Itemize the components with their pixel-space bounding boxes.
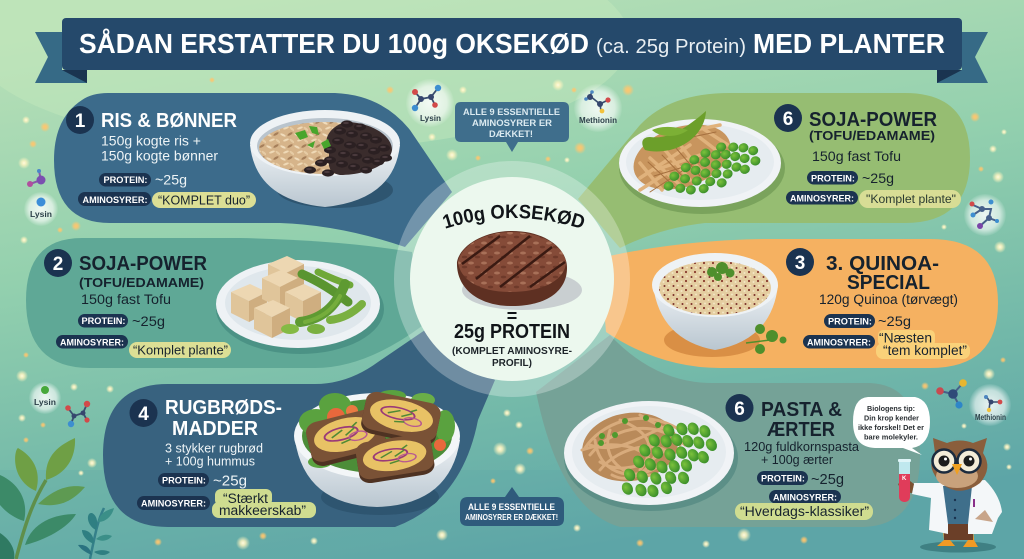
protein row: [757, 471, 844, 488]
aminosyrer row: AMINOSYRER:: [141, 498, 206, 510]
aminosyrer row: [803, 330, 970, 359]
heading: pasta og ærter: [761, 399, 842, 441]
aminosyrer row: AMINOSYRER:: [60, 338, 124, 348]
speech bubble: [853, 397, 930, 455]
amount text: 3 stykker rugbrød: [165, 442, 263, 456]
number badge 6: 6: [734, 399, 745, 420]
callout: bottom: ALLE 9 ESSENTIELLE: [468, 502, 555, 513]
wing and test tube: [898, 478, 914, 493]
protein row: PROTEIN:: [811, 174, 855, 184]
protein row: [158, 473, 247, 490]
protein text: 25g PROTEIN: [454, 321, 570, 343]
curved heading: 100g OKSEKØD: [443, 204, 584, 228]
number badge 2: 2: [53, 254, 63, 275]
title text: (ca. 25g Protein): [596, 36, 746, 58]
callout: top: ALLE 9 ESSENTIELLE: [463, 107, 560, 118]
icon: methionin molecule top: Methionin: [579, 116, 617, 125]
aminosyrer row: “KOMPLET duo”: [158, 192, 250, 208]
number badge 6: 6: [783, 109, 793, 130]
central circle: 100g oksekød: [394, 161, 630, 397]
aminosyrer row: “Stærkt: [223, 491, 268, 506]
amount text: + 100g hummus: [165, 454, 255, 468]
heading: rugbrødsmadder: [165, 397, 282, 440]
equals sign: =: [507, 306, 517, 326]
heading: pasta og ærter: PASTA &: [761, 399, 842, 421]
protein row: ~25g: [878, 313, 911, 329]
heading: rugbrødsmadder: MADDER: [172, 418, 259, 440]
plant: small leaves: [78, 508, 114, 559]
amount text: 120g fuldkornspasta: [744, 440, 859, 454]
heading: soja-power right: [809, 109, 938, 143]
aminosyrer row: AMINOSYRER:: [790, 194, 854, 204]
food: plate of spaghetti and peas: [564, 401, 738, 513]
number badge 3: [786, 248, 814, 276]
protein row: [807, 170, 894, 186]
food: bowl of quinoa with parsley: [652, 253, 786, 357]
heading: quinoa: [826, 253, 939, 294]
callout: top: AMINOSYRER ER: [472, 118, 552, 129]
aminosyrer row: “tem komplet”: [883, 343, 967, 358]
title text: [79, 28, 945, 59]
heading: quinoa: 3. QUINOA-: [826, 253, 939, 275]
icon: lysin molecule top: Lysin: [420, 114, 441, 123]
protein row: ~25g: [213, 474, 247, 490]
icon: red molecule lower left: [65, 401, 90, 427]
number badge 4: 4: [138, 404, 149, 425]
lab coat: [912, 480, 1002, 534]
aminosyrer row: AMINOSYRER:: [807, 338, 871, 348]
number badge 6: [726, 394, 754, 422]
speech bubble: ikke forskel! Det er: [858, 423, 924, 432]
heading: pasta og ærter: ÆRTER: [767, 419, 835, 441]
title banner: [35, 18, 988, 83]
protein row: [99, 172, 187, 188]
callout: top: [455, 102, 569, 152]
number badge 6: [774, 104, 802, 132]
profile text: [452, 345, 572, 369]
plant: large leaves: [0, 438, 85, 559]
number badge 3: 3: [795, 253, 805, 274]
aminosyrer row: [56, 335, 231, 358]
protein row: PROTEIN:: [761, 474, 805, 484]
protein row: ~25g: [811, 472, 844, 488]
protein row: ~25g: [862, 170, 894, 186]
food: plate of pasta, peas and edamame: [619, 111, 785, 214]
speech bubble: Din krop kender: [864, 414, 919, 422]
number badge 4: [130, 399, 158, 427]
number badge 2: [44, 249, 72, 277]
icon: molecule right: [964, 194, 1006, 236]
panel: 6 pasta og ærter: [536, 335, 920, 527]
protein row: [824, 313, 911, 329]
title text: SÅDAN ERSTATTER DU 100g OKSEKØD: [79, 28, 589, 59]
icon: purple molecule: [27, 169, 46, 187]
number badge 1: 1: [75, 111, 86, 132]
icon: lysin left: [24, 192, 58, 226]
amount text: 150g fast Tofu: [812, 149, 901, 164]
heading: soja-power: SOJA-POWER: [79, 253, 208, 275]
amount text: 150g kogte ris +: [101, 134, 201, 148]
aminosyrer row: "Komplet plante": [866, 192, 956, 206]
heading: quinoa: SPECIAL: [847, 272, 930, 294]
heading: soja-power right: SOJA-POWER: [809, 109, 938, 131]
head: [931, 438, 987, 491]
icon: lysin left: Lysin: [30, 210, 52, 219]
title text: MED PLANTER: [753, 28, 945, 59]
aminosyrer row: “Næsten: [879, 330, 932, 346]
amount text: [744, 440, 859, 467]
aminosyrer row: [137, 489, 316, 518]
heading: ris og bønner: RIS & BØNNER: [101, 110, 238, 132]
heading: soja-power: (TOFU/EDAMAME): [79, 275, 204, 290]
heading: soja-power right: (TOFU/EDAMAME): [809, 128, 935, 143]
panel: 2 soja-power: [26, 238, 422, 368]
owl scientist: [898, 438, 1002, 552]
aminosyrer row: “Komplet plante”: [133, 344, 228, 358]
icon: molecule lower right: [936, 379, 967, 409]
aminosyrer row: “Hverdags-klassiker”: [740, 503, 869, 519]
amount text: 150g kogte bønner: [101, 148, 219, 164]
protein row: PROTEIN:: [82, 316, 126, 327]
icon: lysin lower left: [29, 382, 61, 414]
protein row: ~25g: [155, 172, 187, 188]
amount text: 150g fast Tofu: [81, 292, 171, 307]
protein row: PROTEIN:: [828, 316, 872, 328]
food: plate of tofu and edamame: [216, 256, 384, 354]
panel: 6 soja-power (right): [578, 93, 970, 248]
aminosyrer row: [735, 490, 873, 520]
protein row: PROTEIN:: [104, 175, 148, 186]
panel: 3 quinoa: [600, 239, 998, 368]
protein row: PROTEIN:: [162, 476, 206, 486]
icon: methionin lower right: [969, 384, 1011, 426]
aminosyrer row: AMINOSYRER:: [773, 492, 837, 504]
protein row: ~25g: [132, 313, 165, 329]
food: bowl of rice and beans: [250, 110, 400, 208]
aminosyrer row: [78, 192, 256, 208]
panel: 1 ris og bønner: [54, 93, 452, 247]
food: bowl with rye open sandwiches: [294, 390, 460, 515]
amount text: + 100g ærter: [761, 453, 833, 467]
aminosyrer row: makkeerskab”: [219, 503, 306, 518]
heading: rugbrødsmadder: RUGBRØDS-: [165, 397, 282, 419]
callout: bottom: [460, 487, 564, 526]
icon: methionin lower right: Methionin: [975, 413, 1006, 422]
aminosyrer row: AMINOSYRER:: [82, 195, 148, 206]
callout: bottom: AMINOSYRER ER DÆKKET!: [465, 512, 558, 522]
owl scientist: K: [902, 476, 907, 482]
profile text: PROFIL): [492, 357, 532, 369]
heading: soja-power: [79, 253, 208, 290]
amount text: 120g Quinoa (tørvægt): [819, 292, 958, 307]
profile text: (KOMPLET AMINOSYRE-: [452, 345, 572, 357]
amount text: [101, 134, 219, 164]
icon: methionin molecule top: [574, 84, 622, 132]
callout: top: DÆKKET!: [489, 129, 533, 140]
icon: beef patty: [457, 231, 582, 310]
icon: lysin lower left: Lysin: [34, 398, 56, 407]
amount text: [165, 442, 263, 468]
aminosyrer row: [786, 190, 961, 208]
speech bubble: Biologens tip:: [867, 404, 915, 413]
number badge 1: [66, 106, 94, 134]
panel: 4 rugbrødsmadder: [103, 330, 495, 527]
protein row: [78, 313, 165, 329]
icon: lysin molecule top: [406, 79, 454, 127]
speech bubble: bare molekyler.: [864, 432, 918, 442]
